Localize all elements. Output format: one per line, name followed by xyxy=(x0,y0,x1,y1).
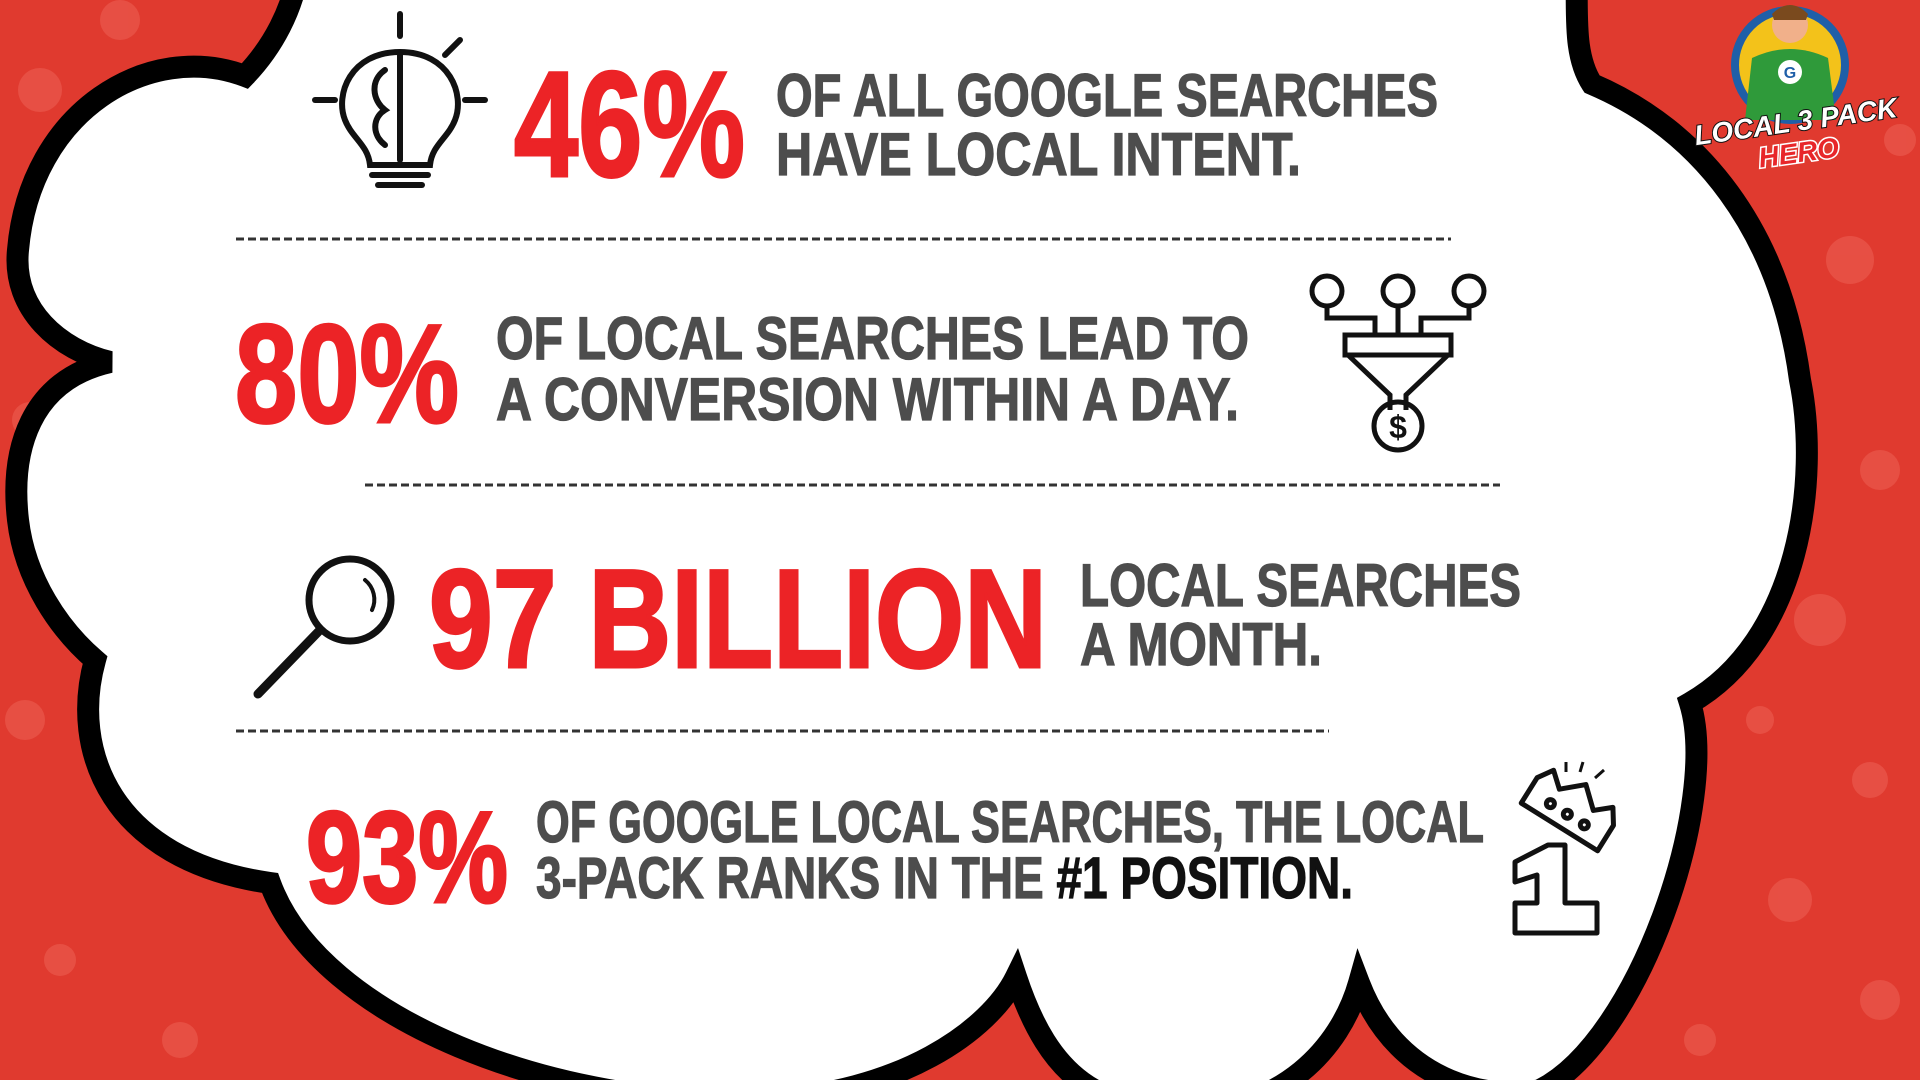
stat 2: OF LOCAL SEARCHES LEAD TO xyxy=(496,305,1249,372)
stat 1: HAVE LOCAL INTENT. xyxy=(776,121,1301,188)
icon: light bulb xyxy=(315,14,485,185)
stat 1 xyxy=(514,40,1438,208)
stat 2: 80% xyxy=(235,295,459,452)
stat 1: 46% xyxy=(514,40,745,208)
stat 4: 3-PACK RANKS IN THE #1 POSITION. xyxy=(536,846,1353,911)
logo: local 3 pack hero xyxy=(1692,5,1901,174)
stat 3: A MONTH. xyxy=(1080,611,1322,678)
logo: local 3 pack hero: LOCAL 3 PACK xyxy=(1692,92,1901,151)
stat 3 xyxy=(429,540,1521,697)
icon: number one with crown xyxy=(1515,761,1624,933)
stat 4: OF GOOGLE LOCAL SEARCHES, THE LOCAL xyxy=(536,790,1484,855)
stat 2 xyxy=(235,295,1249,452)
logo: local 3 pack hero: G xyxy=(1784,65,1796,82)
stat 4 xyxy=(306,784,1484,930)
icon: magnifier xyxy=(258,559,391,694)
stat 3: 97 BILLION xyxy=(429,540,1047,697)
stat 2: A CONVERSION WITHIN A DAY. xyxy=(496,366,1239,433)
logo: local 3 pack hero: HERO xyxy=(1756,132,1841,174)
icon: funnel: $ xyxy=(1389,409,1407,445)
stat 4: 93% xyxy=(306,784,508,930)
stat 1: OF ALL GOOGLE SEARCHES xyxy=(776,62,1438,129)
stat 3: LOCAL SEARCHES xyxy=(1080,552,1521,619)
icon: funnel xyxy=(1312,276,1484,450)
